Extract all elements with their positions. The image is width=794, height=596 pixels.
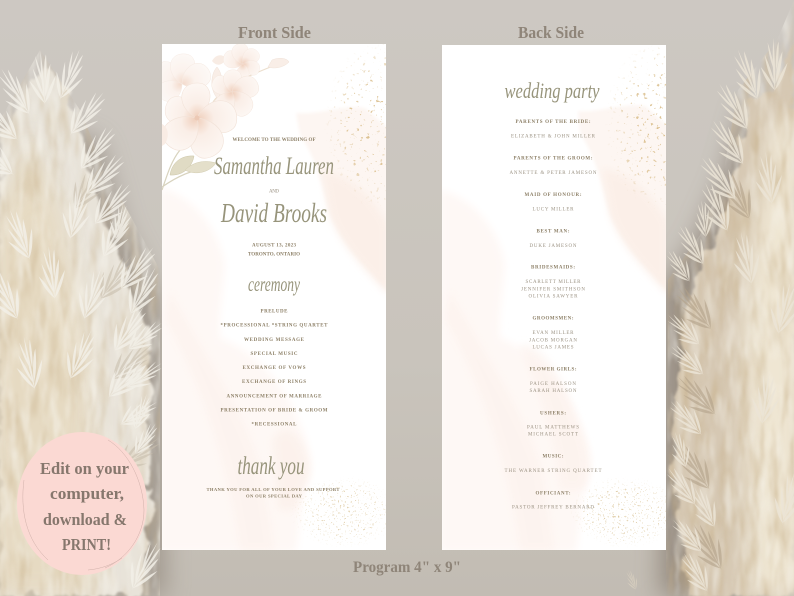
wedding party roles and names: MAID OF HONOUR: (524, 193, 582, 198)
heading: Front Side: Front Side (238, 23, 311, 42)
badge text: Edit on your (40, 459, 129, 478)
ceremony order list (220, 310, 328, 428)
wedding party roles and names: OFFICIANT: (536, 491, 571, 496)
wedding party roles and names: PAUL MATTHEWS (527, 426, 579, 431)
badge text: download & (43, 510, 127, 529)
watercolour washes (440, 105, 670, 552)
ceremony order list: PRESENTATION OF BRIDE & GROOM (220, 409, 328, 414)
upper left blossom (162, 54, 211, 102)
wedding party roles and names: DUKE JAMESON (530, 244, 577, 249)
shadow behind right plume (660, 100, 794, 596)
and: AND (269, 190, 279, 194)
size caption: Program 4" x 9" (353, 559, 461, 576)
wedding party roles and names: PAIGE HALSON (530, 382, 576, 387)
wedding party roles and names: SARAH HALSON (530, 389, 577, 394)
gold speckles: top right (608, 46, 666, 205)
wedding party roles and names: PASTOR JEFFREY BERNARD (512, 506, 594, 511)
gold speckles: top right (326, 44, 386, 202)
edge petal (162, 124, 168, 146)
script heading: ceremony: ceremony (248, 272, 300, 296)
ceremony order list: PRELUDE (260, 310, 288, 315)
wedding party roles and names: MUSIC: (542, 455, 564, 460)
pampas plume: left (0, 30, 168, 596)
wedding party roles and names: LUCY MILLER (532, 207, 574, 212)
badge text: computer, (50, 484, 124, 503)
right blossom (212, 70, 259, 117)
wedding party roles and names: ELIZABETH & JOHN MILLER (511, 134, 596, 139)
wedding party roles and names: SCARLETT MILLER (526, 280, 581, 285)
large blossom (165, 82, 237, 158)
gold speckles: bottom right (295, 478, 386, 546)
date and place: AUGUST 13, 2023 (252, 244, 296, 248)
wedding party roles and names: EVAN MILLER (532, 331, 574, 336)
wedding party roles and names: ANNETTE & PETER JAMESON (510, 171, 597, 176)
wedding party roles and names: FLOWER GIRLS: (530, 368, 577, 373)
ceremony order list: *PROCESSIONAL *STRING QUARTET (220, 324, 328, 329)
wedding party roles and names: USHERS: (540, 411, 566, 416)
thank you message: ON OUR SPECIAL DAY (246, 494, 303, 498)
wedding party roles and names: MICHAEL SCOTT (528, 433, 578, 438)
wedding party roles and names (504, 120, 602, 511)
thank you message (206, 487, 340, 498)
wedding party roles and names: OLIVIA SAWYER (528, 295, 578, 300)
ceremony order list: SPECIAL MUSIC (250, 352, 298, 357)
watercolour washes (160, 107, 390, 552)
callout badge (17, 432, 147, 575)
ceremony order list: ANNOUNCEMENT OF MARRIAGE (226, 394, 322, 399)
wedding party roles and names: BEST MAN: (536, 229, 570, 234)
gold speckles: bottom right (573, 478, 666, 546)
script heading: thank you: thank you (238, 453, 304, 480)
welcome line: WELCOME TO THE WEDDING OF (232, 138, 316, 143)
wedding party roles and names: LUCAS JAMES (532, 346, 574, 351)
date and place: TORONTO, ONTARIO (248, 252, 300, 258)
floral illustration (150, 42, 289, 190)
script heading: wedding party: wedding party (504, 78, 600, 103)
date and place (248, 244, 300, 258)
wedding party roles and names: PARENTS OF THE GROOM: (514, 156, 593, 161)
badge text (40, 459, 129, 554)
wedding party roles and names: BRIDESMAIDS: (531, 266, 575, 271)
badge circle (17, 432, 147, 575)
script name: Samantha Lauren: Samantha Lauren (214, 153, 334, 180)
panel: back side program card (440, 45, 670, 552)
thank you message: THANK YOU FOR ALL OF YOUR LOVE AND SUPPORT (206, 487, 340, 492)
panel: front side program card (150, 42, 390, 552)
badge text: PRINT! (62, 535, 111, 554)
pampas plume: right (623, 0, 794, 596)
shadow behind left plume (0, 130, 166, 596)
top blossom (224, 44, 260, 77)
ceremony order list: WEDDING MESSAGE (244, 338, 305, 343)
badge sketch rings (23, 440, 144, 570)
wedding party roles and names: THE WARNER STRING QUARTET (504, 469, 602, 474)
script name: David Brooks: David Brooks (220, 198, 327, 228)
wedding party roles and names: PARENTS OF THE BRIDE: (516, 120, 591, 125)
wedding party roles and names: JENNIFER SMITHSON (521, 287, 585, 292)
ceremony order list: *RECESSIONAL (252, 423, 297, 428)
heading: Back Side: Back Side (518, 23, 584, 42)
wedding party roles and names: GROOMSMEN: (532, 317, 574, 322)
ceremony order list: EXCHANGE OF VOWS (242, 366, 306, 371)
stems and buds (162, 55, 289, 190)
wedding party roles and names: JACOB MORGAN (529, 338, 577, 343)
ceremony order list: EXCHANGE OF RINGS (242, 380, 306, 385)
